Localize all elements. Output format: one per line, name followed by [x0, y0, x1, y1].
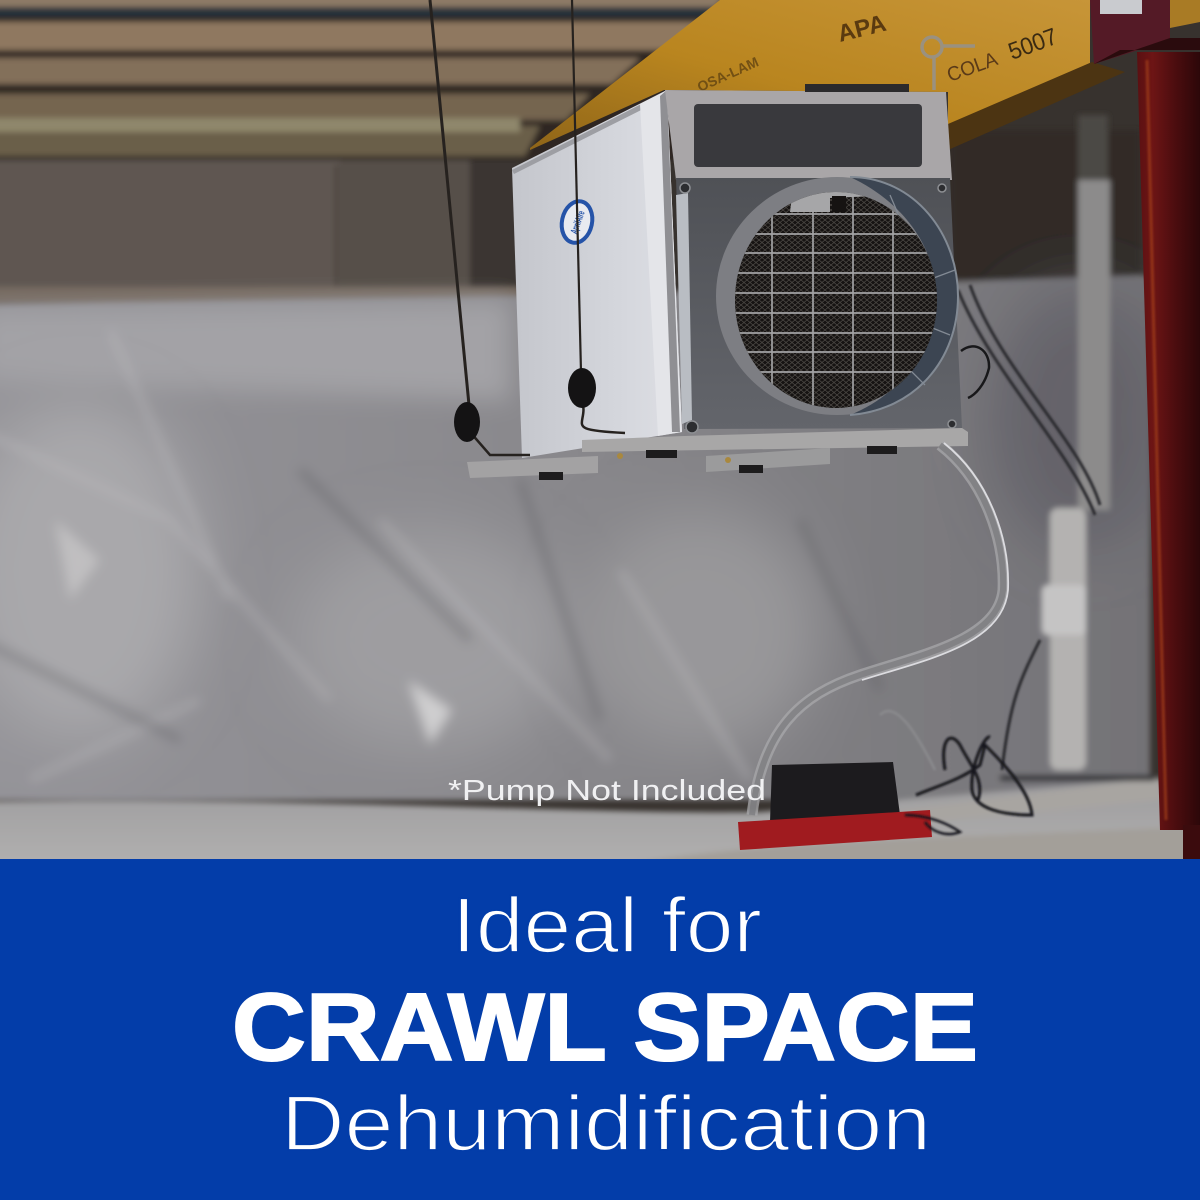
- white drain pipes: [1078, 115, 1108, 190]
- black cables on wall: [958, 285, 1100, 770]
- heading line 1: Ideal for: [452, 881, 762, 969]
- clear drain hose: [752, 443, 1008, 815]
- strap ratchets: [454, 368, 596, 442]
- power loop cord: [961, 346, 989, 398]
- filter grid: [735, 192, 937, 408]
- yellow lumber beam: APA: [835, 10, 889, 48]
- pump cords: [880, 711, 1032, 834]
- screws: [680, 183, 956, 433]
- heading line 3: Dehumidification: [281, 1079, 931, 1167]
- mounting tray: [582, 428, 968, 452]
- dehumidifier unit: [467, 84, 989, 480]
- white vapor barrier sheet: [0, 275, 1150, 800]
- hanging straps: [430, 0, 625, 455]
- blurred background: wall, joists, sheet, floor: [0, 0, 1200, 880]
- hook on beam: [922, 37, 975, 90]
- collar: [716, 177, 930, 415]
- heading line 2: CRAWL SPACE: [232, 974, 978, 1081]
- floor sheet: [0, 778, 1183, 859]
- logo: [560, 199, 594, 245]
- pump: [738, 762, 932, 850]
- yellow lumber beam: 5007: [1005, 23, 1061, 66]
- side panel: [512, 90, 682, 458]
- yellow lumber beam: COLA: [944, 48, 1001, 87]
- photo: crawl space scene: [0, 0, 1200, 880]
- front grey plate: [676, 178, 962, 429]
- ceiling joists: [0, 22, 692, 163]
- dehumidifier unit: AprilAire: [569, 209, 588, 236]
- concrete block wall: [338, 158, 472, 289]
- red steel post and bracket: [1090, 0, 1200, 859]
- yellow lumber beam: OSA-LAM: [695, 54, 761, 95]
- front top panel: [665, 90, 952, 180]
- banner: [0, 859, 1200, 1200]
- caption: *Pump Not Included: [448, 775, 766, 807]
- yellow lumber beam: [530, 0, 1200, 150]
